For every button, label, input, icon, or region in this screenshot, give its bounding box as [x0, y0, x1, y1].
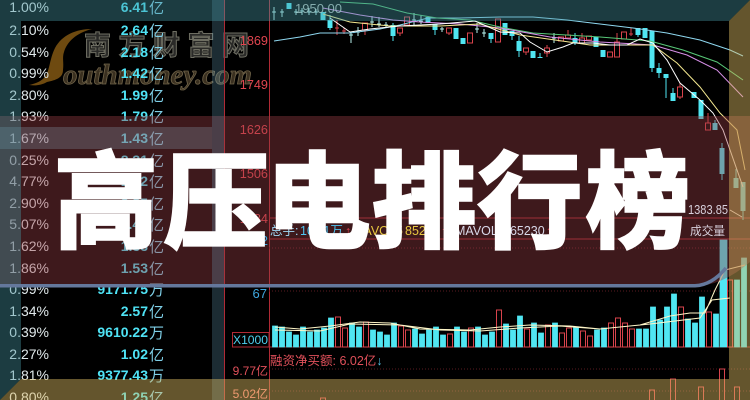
multiplier box: X1000: [233, 333, 268, 347]
watermark domain: outhmoney.com: [63, 60, 252, 91]
candlestick chart: [272, 3, 746, 220]
stock table: unit column: 万: [149, 325, 164, 342]
label: low price: 1383.85: [688, 203, 728, 217]
volume legend row: [270, 224, 552, 238]
stock table: unit column: 万: [149, 368, 164, 385]
stock table: unit column: [149, 0, 164, 400]
volume legend row: MAVOL5: [353, 224, 403, 238]
stock table: amount column: 1.02: [121, 346, 148, 362]
price axis labels: 1506: [240, 167, 268, 181]
red candles: [335, 17, 710, 130]
volume legend row: ↑: [546, 224, 552, 238]
stock table: unit column: 亿: [149, 153, 164, 170]
stock table: unit column: 亿: [149, 304, 164, 321]
stock table: percent column: 0.54%: [9, 44, 49, 60]
stock table: percent column: 2.27%: [9, 346, 49, 362]
stock table: amount column: 2.18: [121, 44, 148, 60]
lower axis value top: 9.77亿: [233, 363, 268, 378]
stock table: unit column: 亿: [149, 196, 164, 213]
watermark swoosh S: [29, 29, 92, 85]
stock table: unit column: 亿: [149, 23, 164, 40]
moving average lines: [274, 2, 745, 217]
volume legend row: 165230: [503, 224, 545, 238]
stock table: percent column: 1.86%: [9, 260, 49, 276]
cyan candle wicks: [330, 15, 743, 220]
stock table: amount column: 1.22: [121, 173, 148, 189]
stock table: percent column: 1.34%: [9, 303, 49, 319]
stock table: unit column: 亿: [149, 0, 164, 17]
stock table: amount column: 1.79: [121, 108, 148, 124]
stock table: amount column: 2.35: [121, 195, 148, 211]
margin buying label: 融资净买额: 6.02亿↓: [270, 353, 383, 368]
stock table: percent column: 2.10%: [9, 22, 49, 38]
stock table: percent column: 1.81%: [9, 367, 49, 383]
red volume bars: [336, 280, 732, 347]
price axis labels: 1749: [240, 78, 268, 92]
price axis labels: 1626: [240, 123, 268, 137]
stock table: unit column: 亿: [149, 261, 164, 278]
stock table: unit column: 万: [149, 282, 164, 299]
stock table: amount column: [97, 0, 148, 400]
volume legend row: MAVOL10: [455, 224, 512, 238]
stock table: percent column: 1.62%: [9, 238, 49, 254]
stock table: amount column: 9171.75: [97, 281, 148, 297]
stock table: amount column: 1.53: [121, 260, 148, 276]
vertical translucent strip: [212, 0, 224, 400]
small cross candles: [272, 7, 556, 43]
chart top price label: 1950.00: [295, 1, 342, 16]
stock table: unit column: 亿: [149, 174, 164, 191]
lower indicator bars: [320, 369, 740, 400]
stock table: percent column: 0.25%: [9, 152, 49, 168]
stock table: amount column: 8.31: [121, 152, 148, 168]
price axis labels: [240, 34, 268, 226]
volume bars: [272, 240, 746, 347]
volume legend row: 8521: [405, 224, 433, 238]
watermark: [29, 29, 256, 91]
price axis labels: 1384: [240, 212, 268, 226]
stock table: percent column: 5.07%: [9, 216, 49, 232]
stock table: amount column: 2.57: [121, 303, 148, 319]
label: volume title: 成交量: [690, 224, 725, 238]
stock table: unit column: 亿: [149, 347, 164, 364]
stock table: percent column: 1.93%: [9, 108, 49, 124]
cyan candle bodies: [286, 3, 746, 211]
volume average lines: [275, 265, 745, 331]
volume axis value: 67: [253, 286, 267, 301]
volume legend row: ↑: [441, 224, 447, 238]
band lower edge: [0, 268, 726, 286]
volume legend row: 总手:: [270, 224, 298, 238]
highlighted table row: [0, 127, 212, 149]
stock table: percent column: 2.80%: [9, 87, 49, 103]
stock table: unit column: 亿: [149, 109, 164, 126]
band: maroon overlay: [0, 116, 750, 286]
stock table: percent column: [9, 0, 49, 400]
stock table: unit column: 亿: [149, 66, 164, 83]
stock table: amount column: 1.99: [121, 87, 148, 103]
stock table: percent column: 0.39%: [9, 324, 49, 340]
stock table: amount column: 1.43: [121, 130, 148, 146]
chart axis lines: [224, 0, 750, 400]
cyan volume bars: [272, 240, 746, 347]
stock table: unit column: 亿: [149, 131, 164, 148]
stock table: unit column: 亿: [149, 217, 164, 234]
volume legend row: ↑: [345, 224, 351, 238]
stock table: unit column: 亿: [149, 239, 164, 256]
price axis labels: 1869: [240, 34, 268, 48]
stock table: percent column: 4.77%: [9, 173, 49, 189]
watermark Chinese: 南方财富网: [84, 30, 256, 61]
stock table: unit column: 亿: [149, 45, 164, 62]
stock table: percent column: 0.99%: [9, 65, 49, 81]
volume legend row: 10.11万: [300, 224, 343, 238]
stock table: percent column: 2.90%: [9, 195, 49, 211]
stock table: amount column: 9377.43: [97, 367, 148, 383]
stock table: amount column: 2.64: [121, 22, 148, 38]
stock table: amount column: 9610.22: [97, 324, 148, 340]
stock table: amount column: 1.42: [121, 65, 148, 81]
stock table: percent column: 1.67%: [9, 130, 49, 146]
stock table: percent column: 0.99%: [9, 281, 49, 297]
volume axis label: 2: [261, 233, 268, 248]
title: 高压电排行榜: [54, 146, 690, 262]
stock table: unit column: 亿: [149, 88, 164, 105]
stock table: amount column: 1.33: [121, 238, 148, 254]
stock table: amount column: 1.41: [121, 216, 148, 232]
